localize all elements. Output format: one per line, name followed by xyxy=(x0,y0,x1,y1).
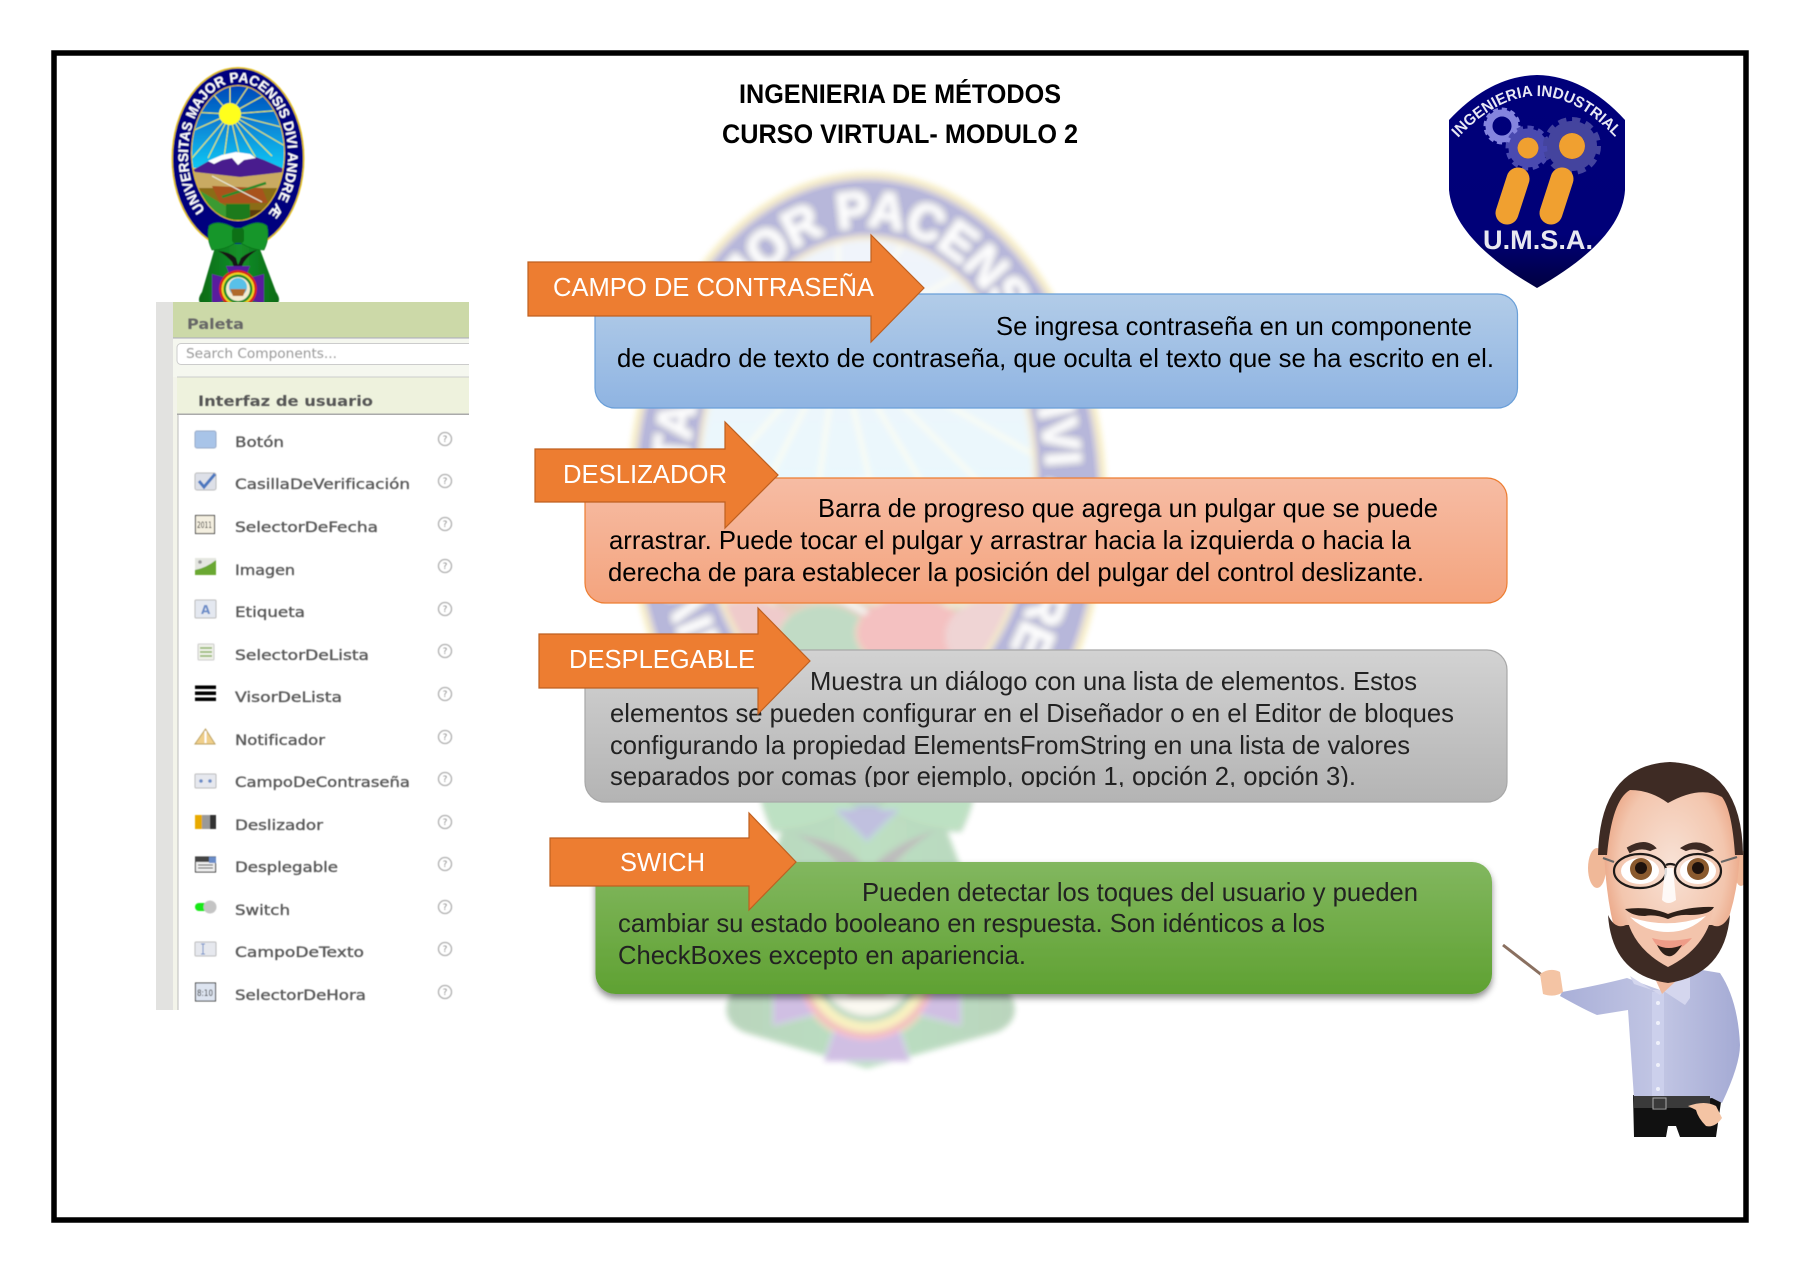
trousers xyxy=(1633,1095,1722,1137)
chin skin xyxy=(1626,911,1713,967)
icon: label: A xyxy=(201,603,211,617)
title xyxy=(722,78,1078,149)
component labels: CampoDeTexto xyxy=(235,945,364,961)
component labels: Switch xyxy=(235,903,290,919)
panel heading: Paleta xyxy=(187,317,244,333)
arrow: deslizador xyxy=(535,422,778,528)
help icons: ? xyxy=(443,860,448,870)
help icons: ? xyxy=(443,690,448,700)
component labels: Notificador xyxy=(235,733,325,749)
help icons: ? xyxy=(443,775,448,785)
glasses xyxy=(1603,854,1737,888)
help icons: ? xyxy=(443,605,448,615)
help icons: ? xyxy=(443,520,448,530)
moustache xyxy=(1625,907,1714,919)
search box: Search Components... xyxy=(186,347,337,362)
component labels: Deslizador xyxy=(235,818,323,834)
pointer xyxy=(1503,945,1543,976)
arrow: swich: SWICH xyxy=(620,847,705,877)
panel: desplegable: configurando la propiedad ElementsFromString en una lista de valores xyxy=(610,730,1410,760)
arrow: swich xyxy=(550,813,796,910)
panel: campo de contraseña xyxy=(595,294,1518,408)
panel: deslizador: Barra de progreso que agrega un pulgar que se puede xyxy=(818,493,1438,523)
panel: deslizador xyxy=(585,478,1507,603)
arrow: campo de contraseña xyxy=(528,235,924,342)
icon: password field xyxy=(195,774,216,788)
arrow: desplegable xyxy=(539,608,810,714)
component labels xyxy=(235,435,410,1004)
panel: desplegable xyxy=(585,650,1507,802)
ears xyxy=(1588,848,1606,888)
logo: Universidad Mayor de San Andrés seal: UNIVERSITAS MAJOR PACENSIS DIVI ANDRE Æ xyxy=(177,72,299,220)
section heading: Interfaz de usuario xyxy=(198,394,373,410)
component labels: Etiqueta xyxy=(235,605,305,621)
panel: deslizador: arrastrar. Puede tocar el pulgar y arrastrar hacia la izquierda o hacia la xyxy=(609,525,1412,555)
icon: button xyxy=(195,431,216,448)
arrow: deslizador: DESLIZADOR xyxy=(563,459,727,489)
panel: deslizador: derecha de para establecer la posición del pulgar del control deslizante. xyxy=(608,557,1424,587)
arrow: desplegable: DESPLEGABLE xyxy=(569,644,755,674)
component labels: CasillaDeVerificación xyxy=(235,477,410,493)
component labels: Imagen xyxy=(235,563,295,579)
panel: desplegable: elementos se pueden configurar en el Diseñador o en el Editor de bloques xyxy=(610,698,1454,728)
face xyxy=(1604,770,1740,982)
help icons: ? xyxy=(443,903,448,913)
title: INGENIERIA DE MÉTODOS xyxy=(739,78,1061,109)
nose xyxy=(1662,868,1676,903)
panel: desplegable: Muestra un diálogo con una lista de elementos. Estos xyxy=(810,666,1417,696)
eyebrows xyxy=(1628,843,1712,852)
icon: switch xyxy=(195,900,216,914)
shirt xyxy=(1560,968,1740,1103)
help icons: ? xyxy=(443,733,448,743)
lower lip xyxy=(1652,938,1692,951)
neck xyxy=(1652,968,1690,994)
help icons: ? xyxy=(443,647,448,657)
panel: switch: CheckBoxes excepto en apariencia. xyxy=(618,940,1026,970)
icon: spinner xyxy=(195,857,216,872)
watermark seal xyxy=(628,169,1109,1071)
logo: Ingeniería Industrial UMSA shield: U.M.S.A. xyxy=(1483,225,1593,255)
logo: Ingeniería Industrial UMSA shield xyxy=(1449,75,1625,288)
help icons: ? xyxy=(443,988,448,998)
shirt placket and buttons xyxy=(1652,992,1664,1096)
component labels: Botón xyxy=(235,435,284,451)
logo: Universidad Mayor de San Andrés seal xyxy=(170,66,306,302)
icon: list picker xyxy=(198,644,214,660)
component labels: CampoDeContraseña xyxy=(235,775,410,791)
hands xyxy=(1540,970,1563,996)
help icons: ? xyxy=(443,818,448,828)
component labels: Desplegable xyxy=(235,860,338,876)
icon: slider xyxy=(195,815,216,829)
panel: switch xyxy=(596,862,1492,994)
help icons: ? xyxy=(443,945,448,955)
panel: Paleta component list xyxy=(156,302,483,1010)
smile xyxy=(1630,916,1706,932)
help icons: ? xyxy=(443,435,448,445)
panel: switch: Pueden detectar los toques del usuario y pueden xyxy=(862,877,1418,907)
title: CURSO VIRTUAL- MODULO 2 xyxy=(722,119,1078,149)
icon: text box xyxy=(195,942,216,956)
logo: Ingeniería Industrial UMSA shield: INGENIERIA INDUSTRIAL xyxy=(1451,85,1618,138)
panel: campo de contraseña: Se ingresa contraseña en un componente xyxy=(996,311,1472,341)
arrow: campo de contraseña: CAMPO DE CONTRASEÑA xyxy=(553,272,875,302)
icon: notifier xyxy=(195,729,215,744)
character: teacher with pointer xyxy=(1503,762,1748,1137)
icon: time picker: 8:10 xyxy=(197,989,213,999)
panel: campo de contraseña: de cuadro de texto de contraseña, que oculta el texto que se ha escrito en el. xyxy=(617,343,1494,373)
beard xyxy=(1608,915,1730,983)
icon: double i pills xyxy=(1507,179,1562,213)
icon: date picker xyxy=(196,516,214,534)
right ear xyxy=(1734,850,1748,886)
icon: label xyxy=(195,600,216,618)
icon: gears xyxy=(1486,110,1598,172)
component labels: SelectorDeHora xyxy=(235,988,366,1004)
component labels: VisorDeLista xyxy=(235,690,342,706)
help icons xyxy=(438,432,452,998)
component labels: SelectorDeLista xyxy=(235,648,369,664)
icon: time picker xyxy=(196,983,216,1001)
hair xyxy=(1598,762,1743,855)
panel: switch: cambiar su estado booleano en respuesta. Son idénticos a los xyxy=(618,908,1325,938)
watermark seal: UNIVERSITAS MAJOR PACENSIS DIVI ANDRE Æ xyxy=(648,187,1086,650)
panel: desplegable: separados por comas (por ejemplo, opción 1, opción 2, opción 3). xyxy=(610,761,1356,791)
collar xyxy=(1630,968,1690,1005)
help icons: ? xyxy=(443,477,448,487)
icon: list view xyxy=(195,686,216,701)
help icons: ? xyxy=(443,562,448,572)
belt xyxy=(1634,1096,1710,1109)
icon: checkbox xyxy=(195,473,216,490)
goatee xyxy=(1657,945,1682,956)
component labels: SelectorDeFecha xyxy=(235,520,378,536)
eyes xyxy=(1621,858,1716,884)
icon: date picker: 2011 xyxy=(197,521,212,531)
icon: image xyxy=(195,558,216,575)
